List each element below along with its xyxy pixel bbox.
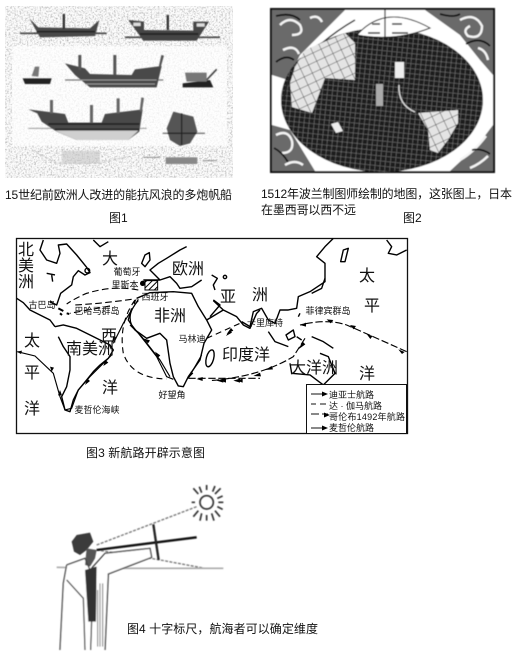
small boat left [23,78,52,84]
figure 2: 1512 world map woodcut [271,9,494,172]
navigator figure [60,533,152,650]
figure 1: engraving of ships [5,6,233,178]
map region labels: 印度洋 [222,346,270,364]
figure 1 caption: 15世纪前欧洲人改进的能抗风浪的多炮帆船 [5,187,232,202]
map region labels: 洋 [102,379,118,397]
coastlines west [17,240,260,412]
hull cross-section [163,131,205,135]
map place labels: 里斯本 [111,279,139,290]
map region labels [18,241,380,418]
map legend: 麦哲伦航路 [329,422,374,433]
ship 2 [125,15,220,41]
map region labels: 洋 [24,400,40,418]
map place labels: 古巴岛 [28,299,56,310]
map place labels: 好望角 [158,389,186,400]
corner clouds [272,10,493,171]
map place labels: 菲律宾群岛 [305,305,351,316]
north polar cap [357,17,430,37]
map place labels: 巴哈马群岛 [74,305,120,316]
figure 2 caption: 1512年波兰制图师绘制的地图，这张图上，日本 [261,186,512,201]
map region labels: 洋 [359,365,375,383]
map place labels: 马林迪 [178,333,206,344]
figure 4 caption: 图4 十字标尺，航海者可以确定维度 [127,621,318,636]
map legend: 迪亚士航路 [329,389,374,400]
map region labels: 北 [18,241,34,259]
figure 4: navigator using cross-staff [57,485,223,650]
map place labels: 麦哲伦海峡 [74,404,120,415]
map legend: 哥伦布1492年航路 [329,411,405,422]
small islands [395,62,404,78]
figure 3: new sea routes map [16,238,408,434]
arrowheads [17,298,243,395]
Lisbon marker [140,281,145,286]
figure 1 label: 图1 [109,211,128,225]
globe [281,28,483,172]
plate inscription [32,150,127,163]
ship 3 [65,55,164,87]
Cuba and Bahamas [58,308,69,315]
Da Gama route [122,300,240,379]
map region labels: 西 [101,328,117,345]
map place labels: 葡萄牙 [113,266,141,277]
map region labels: 洲 [252,287,268,304]
map region labels: 太 [24,332,40,350]
map region labels: 太 [359,267,375,285]
map legend: 达 · 伽马航路 [329,400,382,411]
icon: sun [192,485,223,521]
route through the Indian Ocean [210,338,305,381]
Magellan route across the Pacific [300,322,407,352]
map region labels: 平 [364,298,380,315]
Indian Ocean route west part [188,377,260,380]
horizon [57,565,223,571]
light land: South America [418,110,458,153]
Dias route [130,301,173,379]
map region labels: 非洲 [154,307,186,325]
sight lines [97,507,205,568]
map region labels: 亚 [220,289,236,306]
ship 1 [20,14,107,37]
small ship right [183,80,213,87]
map region labels: 大 [102,250,118,268]
map legend [306,384,406,434]
figure 2 label: 图2 [403,211,422,225]
Columbus routes [67,288,138,313]
map region labels: 平 [24,365,40,382]
map region labels: 洲 [18,274,34,291]
map place labels [28,266,351,415]
Magellan route [17,299,202,410]
map region labels: 欧洲 [172,260,204,278]
Iberia hatched [145,281,158,290]
map place labels: 西班牙 [141,291,169,302]
cross-staff [97,537,197,550]
map region labels: 美 [18,257,34,275]
map place labels: 卡里库特 [247,317,283,328]
light land: Asia [290,33,355,113]
figure 2 caption second line: 在墨西哥以西不远 [261,203,356,217]
map region labels: 大洋洲 [290,359,338,377]
map region labels: 南美洲 [66,340,114,358]
figure 3 caption: 图3 新航路开辟示意图 [86,445,205,460]
coastlines east [210,238,407,385]
ship 4 [28,97,147,140]
